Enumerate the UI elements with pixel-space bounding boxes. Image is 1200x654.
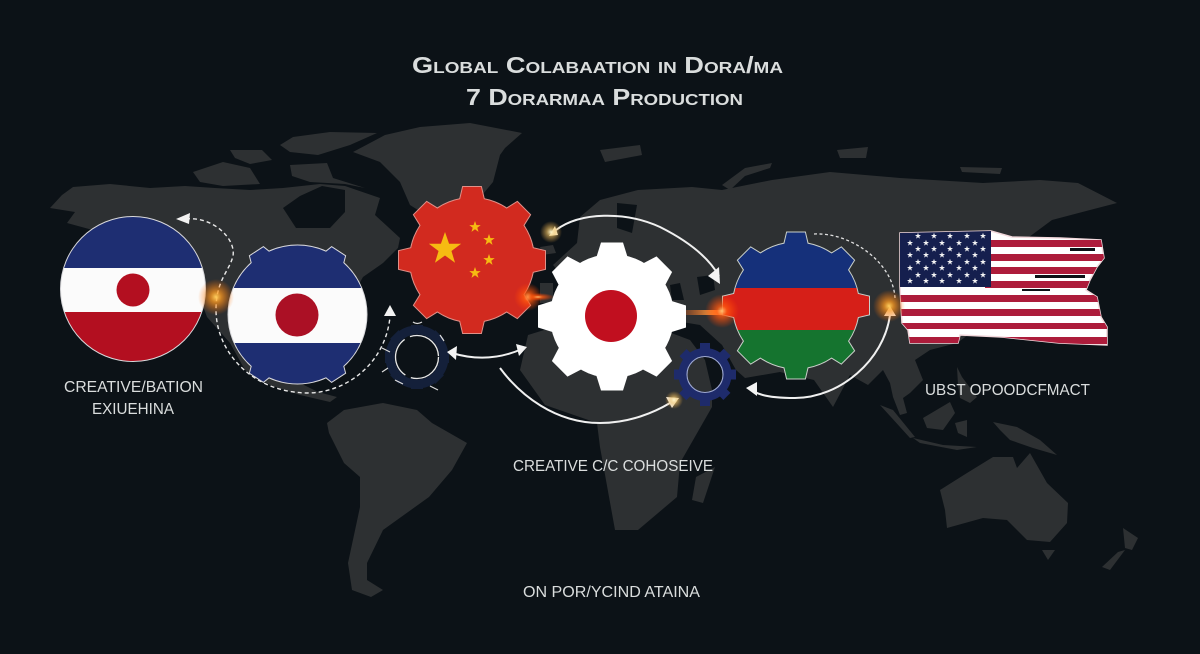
glow: streak at white gear left bbox=[522, 293, 554, 301]
map: Arctic island east bbox=[837, 147, 868, 158]
map: Sulawesi bbox=[955, 420, 967, 437]
map: Eurasia bbox=[553, 172, 1117, 415]
map: Sumatra bbox=[880, 405, 915, 438]
map: North America bbox=[50, 184, 400, 402]
title: 7 Dorarmaa Production bbox=[466, 84, 743, 110]
glow: flag 1 to flag 2 bbox=[198, 279, 234, 315]
map: Madagascar bbox=[692, 467, 715, 503]
arrow: lower arc from white gear to navy gear bbox=[500, 368, 679, 423]
gear flag: Japan white gear bbox=[538, 242, 686, 390]
gear flag: tricolor bbox=[722, 232, 870, 380]
icon: small star 1 bbox=[469, 221, 481, 232]
map: Java bbox=[913, 438, 977, 450]
arrow: solid arc from USA flag to navy gear bbox=[746, 306, 896, 398]
gear flag: blue white blue bbox=[228, 244, 368, 384]
map: Ellesmere bbox=[280, 132, 377, 155]
icon: small star 4 bbox=[469, 267, 481, 278]
USA flag bbox=[895, 225, 1110, 345]
icon: small star 2 bbox=[483, 234, 495, 245]
map: Greenland bbox=[353, 123, 522, 212]
glow: navy gear arrow bbox=[665, 391, 683, 409]
map: South America bbox=[327, 403, 467, 597]
arrow: top arc from China gear to tricolor gear bbox=[549, 216, 720, 284]
map: central arctic islands bbox=[230, 150, 272, 164]
map: Borneo bbox=[923, 402, 955, 430]
circle flag: blue white red bbox=[60, 216, 206, 362]
map: Tasmania bbox=[1042, 550, 1055, 560]
glow: USA arrow bbox=[873, 290, 905, 322]
small navy gear bbox=[674, 343, 736, 406]
glow: top arc start bbox=[540, 221, 562, 243]
arrow: dashed arc to USA flag bbox=[814, 234, 895, 298]
infographic canvas bbox=[50, 56, 1138, 597]
arrowhead: dashed loop top bbox=[176, 213, 190, 224]
glow: streak white gear to tricolor bbox=[686, 310, 722, 315]
map: New Guinea bbox=[993, 422, 1057, 455]
map: UK patch bbox=[540, 283, 553, 303]
map: Novaya Zemlya bbox=[722, 163, 772, 190]
flag tears bbox=[1022, 248, 1095, 291]
map: Philippines bbox=[957, 367, 977, 403]
title bbox=[412, 52, 784, 110]
arrowhead: dashed loop right bbox=[384, 305, 396, 316]
label: left flag caption: EXIUEHINA bbox=[92, 401, 174, 418]
glow: tricolor left edge bbox=[705, 294, 739, 328]
icon: large star bbox=[429, 232, 461, 263]
label: USA caption: UBST OPOODCFMACT bbox=[925, 382, 1090, 399]
map: Siberian islands bbox=[960, 167, 1002, 174]
icon: USA stars bbox=[907, 233, 986, 284]
label: left flag caption bbox=[64, 379, 203, 418]
title: Global Colabaation in Dora/ma bbox=[412, 52, 784, 78]
small dark gear with broken ring bbox=[382, 322, 449, 390]
icon: small star 3 bbox=[483, 254, 495, 265]
gear flag: China bbox=[398, 186, 546, 334]
glow: China gear to white gear bbox=[514, 283, 542, 311]
label: left flag caption: CREATIVE/BATION bbox=[64, 379, 203, 396]
map: inland seas bbox=[283, 186, 730, 368]
label: center caption: CREATIVE C/C COHOSEIVE bbox=[513, 458, 713, 475]
world map bbox=[50, 123, 1138, 597]
map: New Zealand north bbox=[1123, 528, 1138, 550]
map: Arctic island west bbox=[600, 145, 642, 162]
arrow: dashed loop around second flag bbox=[186, 219, 390, 393]
map: Africa bbox=[520, 322, 712, 530]
map: Australia bbox=[940, 453, 1068, 542]
map: Banks and Victoria islands bbox=[193, 162, 260, 186]
map: New Zealand south bbox=[1102, 550, 1125, 570]
double arrow between small gear and white gear bbox=[447, 344, 527, 360]
map: Baffin Island bbox=[290, 163, 365, 188]
map: Iceland patch bbox=[540, 245, 556, 255]
label: bottom caption: ON POR/YCIND ATAINA bbox=[523, 584, 700, 601]
